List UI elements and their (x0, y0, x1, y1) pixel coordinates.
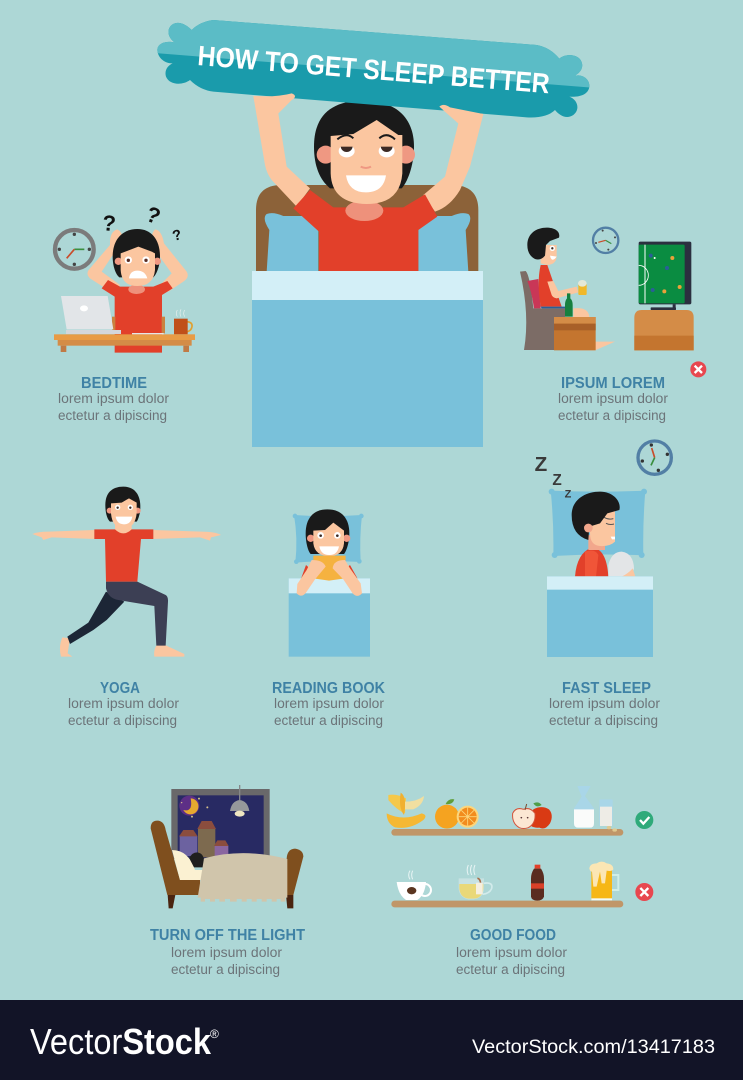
arms (87, 229, 188, 293)
registered mark: ® (210, 1027, 219, 1041)
good food illustration (387, 786, 653, 907)
tea (459, 865, 492, 899)
footer url: VectorStock.com/13417183 (472, 1037, 715, 1058)
back leg (67, 592, 124, 644)
arms (253, 93, 483, 212)
shirt (293, 190, 437, 272)
label: bedtime: lorem ipsum dolor (58, 391, 170, 406)
front leg (106, 582, 168, 646)
title: HOW TO GET SLEEP BETTER (197, 40, 551, 99)
milk (574, 786, 617, 832)
moon (179, 796, 199, 816)
pillow (293, 514, 364, 564)
blanket (289, 578, 370, 657)
smile (346, 175, 386, 192)
television (639, 242, 691, 310)
hair (572, 492, 620, 540)
label: fast sleep: lorem ipsum dolor (549, 696, 661, 711)
label: bedtime: ectetur a dipiscing (58, 408, 167, 423)
neck (128, 285, 145, 294)
sleeves (299, 565, 358, 583)
question marks (101, 201, 184, 245)
hair (113, 229, 160, 277)
neck (345, 200, 383, 221)
label: fast sleep (549, 680, 661, 728)
yoga illustration (32, 487, 221, 657)
label: bedtime (58, 375, 170, 423)
label: yoga (68, 680, 180, 728)
hugged pillow (608, 552, 634, 577)
sleep z letters: Z (535, 453, 548, 476)
apple (513, 802, 552, 829)
book (313, 556, 346, 581)
hands over pillow (253, 93, 295, 113)
label: good food (456, 927, 568, 977)
lamp (230, 785, 249, 817)
body (539, 265, 562, 307)
window (171, 789, 270, 859)
footer logo: VectorStock (30, 1021, 212, 1062)
headboard (256, 185, 478, 272)
label: yoga: lorem ipsum dolor (68, 696, 180, 711)
unhealthy shelf (391, 901, 623, 907)
chair (112, 317, 115, 333)
label: reading book (272, 680, 385, 728)
armchair (520, 271, 565, 350)
nose (361, 167, 371, 168)
arms and hands (297, 560, 326, 596)
label: ipsum lorem (558, 375, 669, 423)
question marks: ? (101, 210, 117, 236)
label: fast sleep: FAST SLEEP (562, 680, 651, 697)
ears (317, 146, 335, 164)
label: turn off the light: lorem ipsum dolor (171, 945, 283, 960)
label: ipsum lorem: ectetur a dipiscing (558, 408, 666, 423)
wall clock (593, 228, 618, 253)
question marks: ? (143, 201, 164, 229)
tv stand (634, 310, 694, 350)
main illustration: person in bed lifting pillow (253, 93, 483, 272)
pillow (549, 489, 647, 558)
label: reading book: READING BOOK (272, 680, 385, 697)
question marks: ? (171, 227, 184, 245)
arms (32, 530, 94, 540)
bottle (565, 293, 573, 317)
hair (306, 509, 349, 554)
main bed blanket (252, 271, 483, 447)
label: turn off the light (150, 927, 305, 977)
label: fast sleep: ectetur a dipiscing (549, 713, 658, 728)
footer bar (0, 1000, 743, 1080)
label: ipsum lorem: IPSUM LOREM (561, 375, 665, 392)
bedtime illustration (54, 201, 195, 353)
neck (115, 523, 132, 534)
label: ipsum lorem: lorem ipsum dolor (558, 391, 669, 406)
mug (187, 322, 192, 332)
bed frame (151, 821, 200, 895)
orange (435, 799, 479, 829)
blanket (547, 576, 653, 657)
label: good food: GOOD FOOD (470, 927, 556, 944)
face (331, 120, 402, 204)
hair (314, 101, 414, 188)
houses (179, 821, 229, 857)
label: good food: ectetur a dipiscing (456, 962, 565, 977)
face (590, 508, 615, 546)
coffee (397, 871, 431, 900)
face (313, 523, 344, 556)
side table (554, 317, 596, 350)
sleep z letters: Z (565, 488, 572, 500)
label: good food: lorem ipsum dolor (456, 945, 568, 960)
sleep z letters (535, 453, 572, 500)
sleeper hair (189, 852, 204, 867)
face (111, 498, 137, 528)
beer (578, 283, 587, 295)
label: reading book: ectetur a dipiscing (274, 713, 383, 728)
label: turn off the light: TURN OFF THE LIGHT (150, 927, 305, 944)
healthy shelf (391, 829, 623, 836)
wall clock (55, 230, 94, 269)
label: yoga: YOGA (100, 680, 140, 697)
label: reading book: lorem ipsum dolor (274, 696, 385, 711)
label: yoga: ectetur a dipiscing (68, 713, 177, 728)
blanket (198, 853, 287, 902)
laptop (61, 296, 113, 329)
fast sleep illustration (535, 441, 671, 657)
check icon (635, 811, 653, 829)
eyes (337, 135, 396, 157)
hair (105, 487, 140, 522)
sleep z letters: Z (552, 472, 562, 489)
banana (387, 793, 425, 828)
bed pillows (265, 213, 470, 272)
no icon (635, 883, 653, 901)
shirt (94, 529, 153, 582)
no icon (690, 361, 706, 377)
label: turn off the light: ectetur a dipiscing (171, 962, 280, 977)
neck (588, 535, 605, 550)
desk (54, 334, 195, 340)
head (541, 245, 557, 265)
reading book illustration (289, 509, 370, 657)
face (121, 247, 155, 286)
turn off the light illustration (151, 785, 303, 908)
TV watching illustration (520, 228, 706, 377)
sleeper pillow (172, 850, 203, 880)
wall clock (638, 441, 671, 474)
beer (589, 862, 618, 900)
cola (531, 865, 544, 901)
shirt (102, 280, 173, 353)
title pillow banner (157, 20, 589, 130)
pillow shape (157, 20, 589, 130)
shoulder (575, 547, 608, 577)
feet (60, 637, 184, 657)
label: bedtime: BEDTIME (81, 375, 147, 392)
